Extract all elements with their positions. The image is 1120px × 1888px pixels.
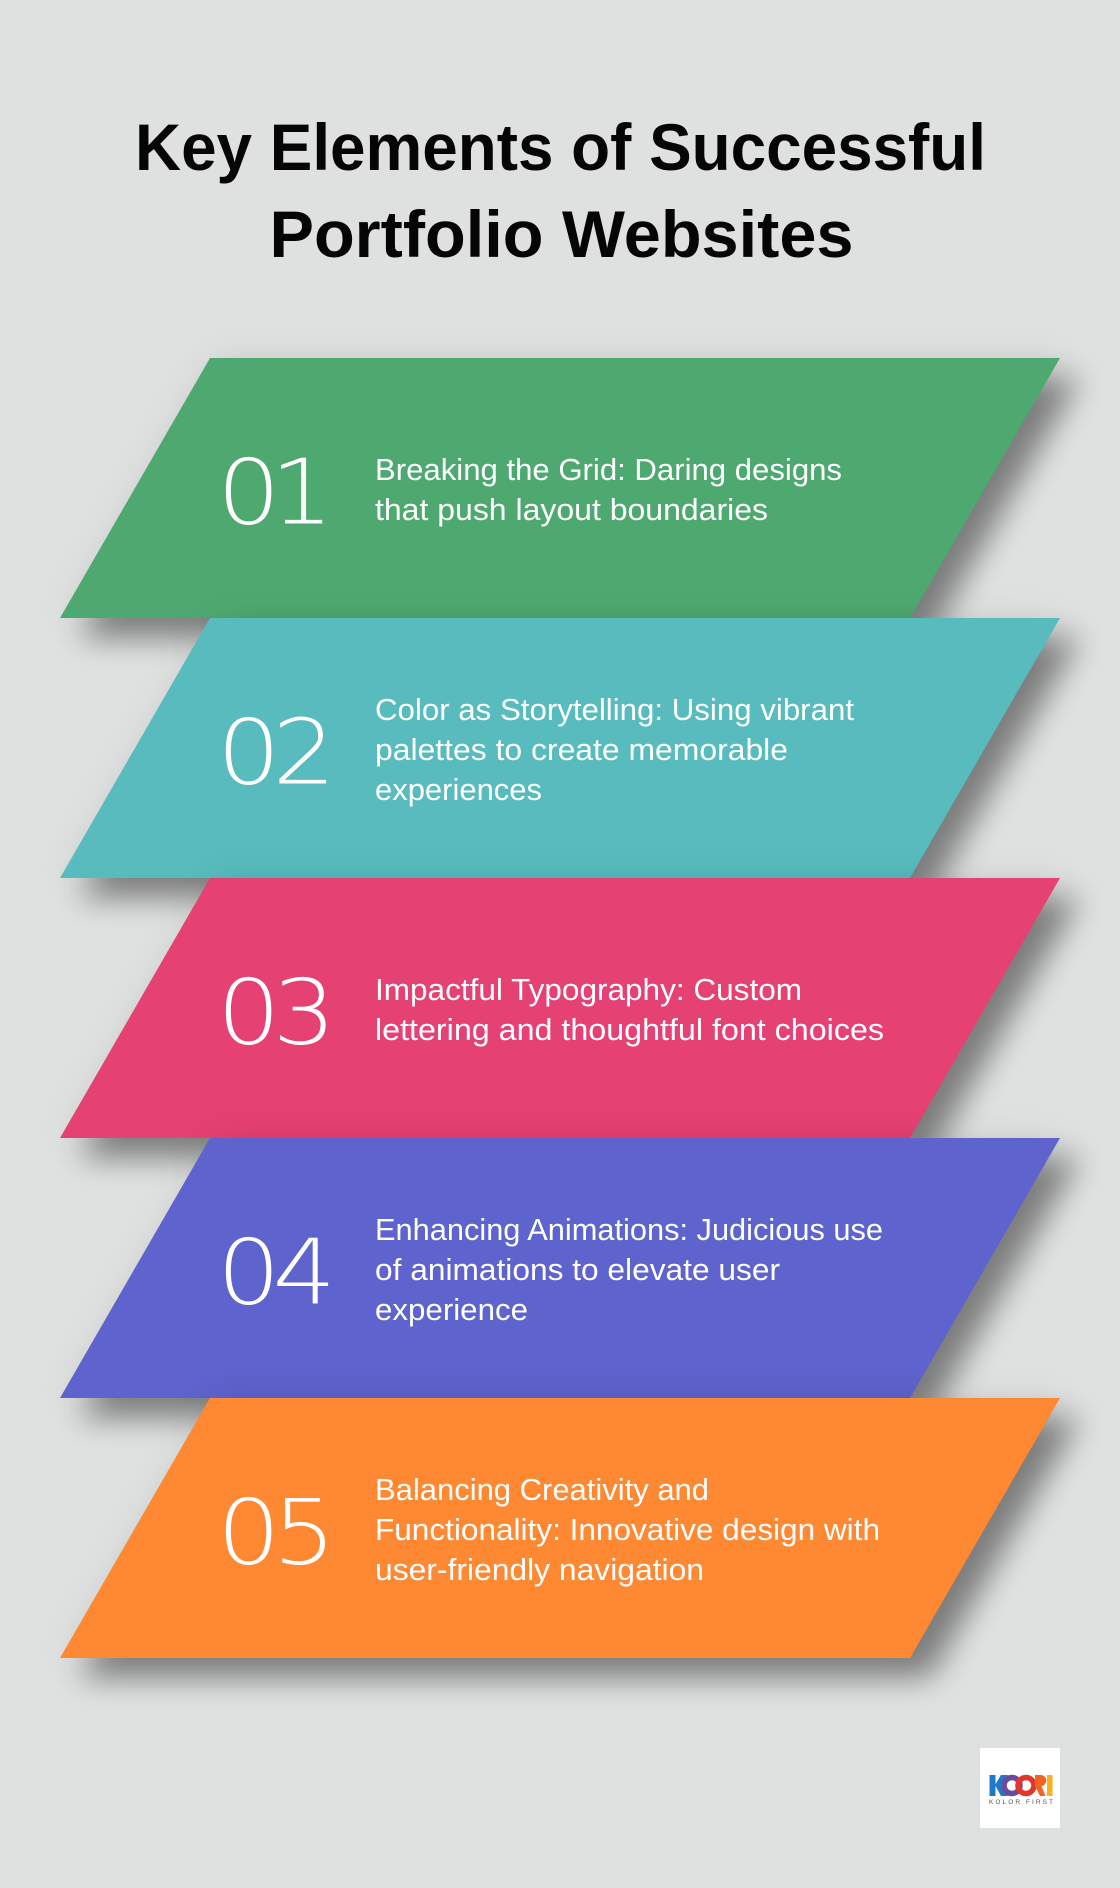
panel: step 01 [60,358,1060,618]
band: green [60,358,1060,618]
number 04: 04 [217,1221,336,1325]
text 03: lettering and thoughtful font choices [375,1013,884,1047]
panel: step 05 [60,1398,1060,1658]
text 02: palettes to create memorable [375,733,788,767]
text 01 [375,453,842,527]
text 04 [375,1213,883,1327]
text 02: experiences [375,773,542,807]
text 05: Functionality: Innovative design with [375,1513,880,1547]
band: indigo [60,1138,1060,1398]
text 05 [375,1473,880,1587]
text 03 [375,973,884,1047]
text 01: Breaking the Grid: Daring designs [375,453,842,487]
title: Portfolio Websites [270,197,854,271]
text 04: Enhancing Animations: Judicious use [375,1213,883,1247]
panel: step 04 [60,1138,1060,1398]
number 02: 02 [217,701,336,805]
panel: step 02 [60,618,1060,878]
text 02 [375,693,855,807]
text 01: that push layout boundaries [375,493,768,527]
panel: step 03 [60,878,1060,1138]
logo: KOOR1 Kolor First: KOLOR FIRST [989,1799,1053,1806]
text 03: Impactful Typography: Custom [375,973,802,1007]
number 03: 03 [217,961,336,1065]
logo: KOOR1 Kolor First [980,1748,1060,1828]
band: orange [60,1398,1060,1658]
number 01: 01 [217,441,334,545]
text 04: experience [375,1293,528,1327]
band: teal [60,618,1060,878]
text 05: user-friendly navigation [375,1553,704,1587]
title: Key Elements of Successful [135,110,986,184]
title [135,110,986,271]
number 05: 05 [217,1481,336,1585]
text 04: of animations to elevate user [375,1253,780,1287]
band: pink [60,878,1060,1138]
text 02: Color as Storytelling: Using vibrant [375,693,855,727]
text 05: Balancing Creativity and [375,1473,709,1507]
